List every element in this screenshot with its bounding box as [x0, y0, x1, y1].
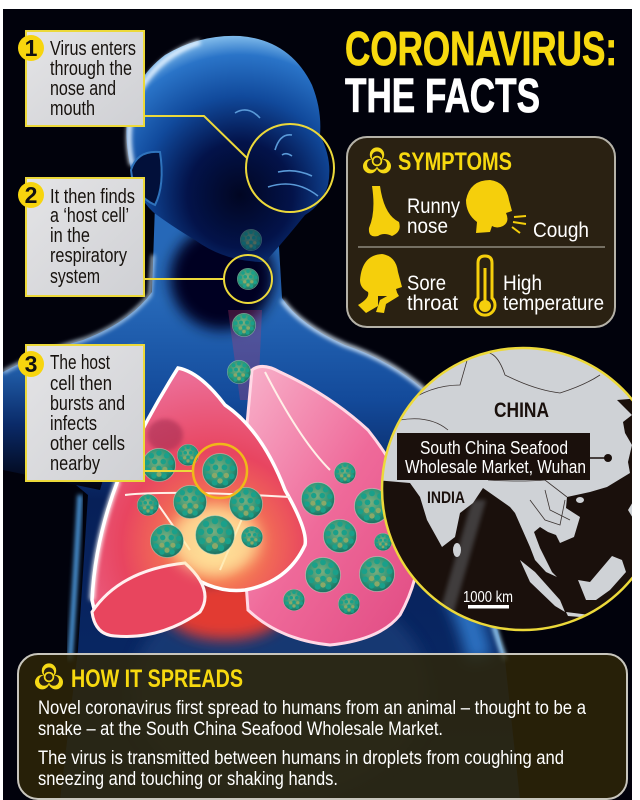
spreads text: snake – at the South China Seafood Wholesale Market. — [38, 719, 443, 740]
red glow below lungs — [165, 580, 285, 640]
left arm shading — [3, 340, 144, 490]
panel: symptoms — [347, 137, 615, 327]
lungs — [92, 366, 420, 645]
abdomen glow — [139, 621, 421, 653]
borders — [400, 350, 600, 525]
eastern islands — [628, 504, 632, 516]
callout connectors and circles — [144, 116, 334, 498]
callout 2: a ‘host cell’ — [50, 205, 129, 227]
label: china: CHINA — [494, 399, 549, 422]
throat airway — [228, 310, 262, 400]
title: THE FACTS — [345, 70, 540, 123]
callout 3: cell then — [50, 373, 112, 395]
icon: biohazard — [363, 147, 391, 173]
neck shadow — [170, 226, 274, 330]
label: sore throat: Sore — [407, 272, 446, 295]
callout 2: 2 — [25, 182, 37, 208]
lung dark spot — [147, 419, 183, 451]
spreads text: The virus is transmitted between humans in droplets from coughing and — [38, 748, 564, 769]
location label: wuhan market: Wholesale Market, Wuhan — [405, 457, 586, 477]
label: runny nose: Runny — [407, 195, 460, 218]
sri lanka — [453, 543, 461, 557]
callout 1: 1 — [25, 35, 38, 61]
callout 1: nose and — [50, 78, 116, 100]
icon: sore throat head — [358, 254, 402, 313]
lower left lobe — [92, 563, 205, 636]
callout 3 — [18, 345, 144, 481]
left lung — [92, 368, 305, 631]
panel: how it spreads — [18, 654, 627, 799]
head left glow — [129, 42, 200, 165]
map inset — [375, 340, 640, 630]
human body illustration — [3, 36, 520, 800]
callout 1: mouth — [50, 98, 95, 120]
virus particles — [137, 229, 395, 615]
borneo — [578, 556, 626, 600]
spreads heading: HOW IT SPREADS — [71, 665, 243, 693]
map sea — [383, 399, 632, 629]
location label: wuhan market — [397, 433, 612, 480]
label: sore throat — [407, 272, 458, 315]
callout 1: Virus enters — [50, 38, 136, 60]
sea light streak — [440, 498, 487, 612]
spreads text: sneezing and touching or shaking hands. — [38, 769, 338, 790]
label: high temperature — [503, 272, 604, 315]
callout 3: other cells — [50, 433, 125, 455]
map circle outline — [382, 348, 640, 630]
lung glow — [170, 505, 260, 575]
location label: wuhan market: South China Seafood — [420, 438, 568, 458]
callout 1 — [18, 31, 144, 126]
callout 3: The host — [50, 352, 110, 374]
label: runny nose — [407, 195, 460, 238]
title — [345, 23, 617, 123]
right body streak — [488, 627, 509, 661]
callout 2: system — [50, 266, 100, 288]
land — [375, 340, 640, 577]
right lung — [240, 366, 420, 645]
ear — [131, 152, 162, 205]
spreads text — [38, 698, 586, 790]
java — [566, 612, 586, 617]
callout 3: bursts and — [50, 393, 125, 415]
right body glow — [438, 604, 498, 657]
callout 2 — [18, 178, 144, 296]
callout 2: in the — [50, 225, 90, 247]
label: high temperature: High — [503, 272, 542, 295]
symptoms heading: SYMPTOMS — [398, 148, 512, 176]
divider — [358, 246, 605, 248]
shoulder rim light — [3, 255, 153, 372]
callout 3: infects — [50, 413, 97, 435]
icon: coughing head — [466, 180, 526, 233]
callout 3: 3 — [25, 351, 37, 377]
right shoulder rim light — [282, 300, 430, 395]
label: high temperature: temperature — [503, 292, 604, 315]
map scale: 1000 km — [463, 589, 513, 606]
callout 2: respiratory — [50, 245, 127, 267]
callout 2: It then finds — [50, 186, 135, 208]
lung fissures — [125, 372, 330, 570]
label: runny nose: nose — [407, 215, 448, 238]
facial features — [235, 110, 318, 196]
label: sore throat: throat — [407, 292, 458, 315]
sumatra — [520, 560, 565, 612]
icon: biohazard — [35, 663, 63, 689]
lung outer glow — [92, 480, 118, 600]
callout 3: nearby — [50, 453, 100, 475]
callout 1: through the — [50, 58, 132, 80]
arm inner streak — [70, 495, 80, 660]
lake — [576, 497, 584, 503]
label: cough: Cough — [533, 219, 589, 242]
torso and shoulders — [3, 205, 520, 800]
icon: thermometer — [475, 256, 495, 315]
label: india: INDIA — [427, 488, 465, 507]
icon: nose — [369, 186, 400, 236]
head — [126, 36, 329, 262]
